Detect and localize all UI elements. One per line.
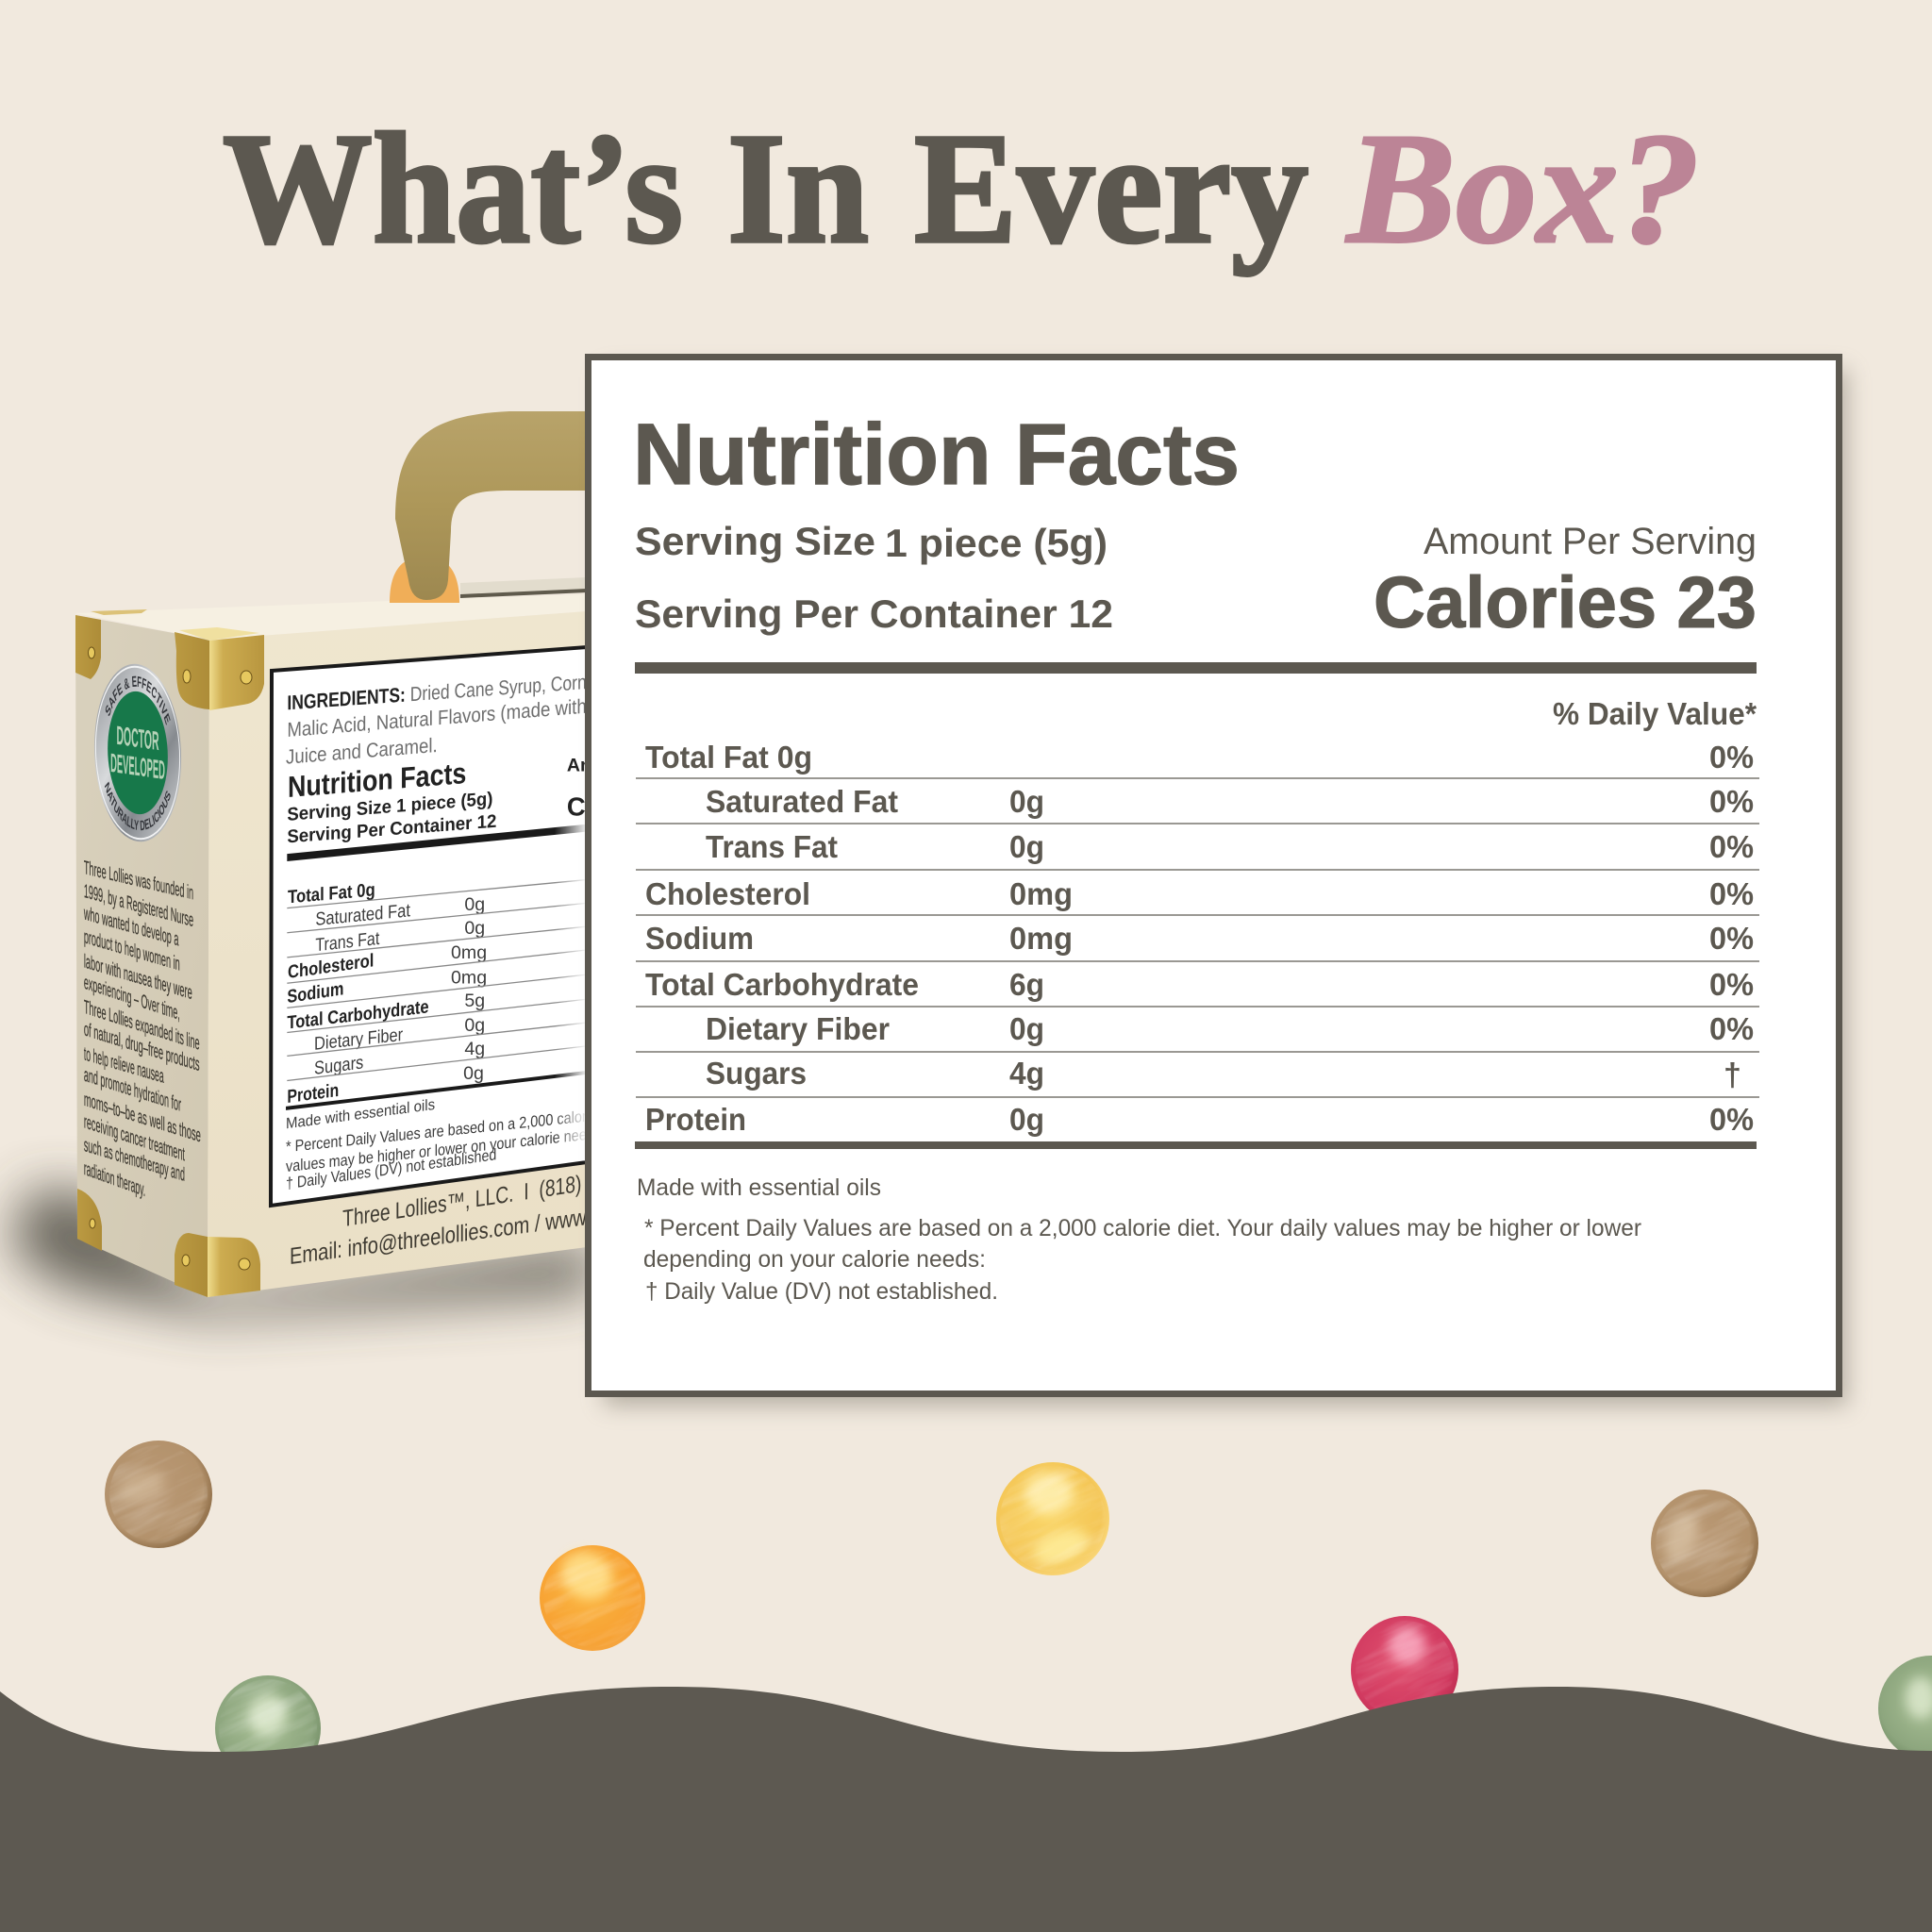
lid seam bbox=[460, 577, 587, 598]
badge: doctor developed: DOCTOR bbox=[116, 720, 159, 757]
candy: yellow bbox=[983, 1449, 1123, 1589]
row: sodium bbox=[645, 921, 1754, 956]
side panel story text: product to help women in bbox=[84, 926, 180, 975]
servings per container: Serving Per Container 12 bbox=[635, 591, 1113, 636]
product box bbox=[0, 354, 1858, 1417]
title bbox=[223, 101, 1700, 276]
box label text: 5g bbox=[464, 991, 485, 1011]
footnotes: depending on your calorie needs: bbox=[643, 1246, 986, 1273]
row: sugars: † bbox=[1724, 1058, 1741, 1093]
nutrition label on box bbox=[271, 647, 587, 1206]
box label text: 0g bbox=[464, 1015, 485, 1036]
row: sodium: Sodium bbox=[645, 921, 754, 956]
box label text: Malic Acid, Natural Flavors (made with bbox=[287, 694, 587, 741]
box top face bbox=[75, 594, 587, 640]
row: sodium: 0mg bbox=[1009, 921, 1073, 956]
footnotes: Made with essential oils bbox=[637, 1174, 881, 1201]
box label text: 0g bbox=[464, 918, 485, 939]
row: trans fat: 0g bbox=[1009, 829, 1044, 864]
gold corner: top left bbox=[75, 609, 147, 679]
rule bbox=[635, 662, 1757, 674]
box front face bbox=[208, 611, 587, 1297]
badge: doctor developed: DEVELOPED bbox=[110, 748, 165, 785]
row: sugars: 4g bbox=[1009, 1056, 1044, 1091]
side panel story text: to help relieve nausea bbox=[84, 1043, 164, 1088]
row: protein: 0% bbox=[1709, 1102, 1754, 1137]
footnotes: † Daily Value (DV) not established. bbox=[645, 1278, 998, 1305]
box label text: Trans Fat bbox=[315, 928, 380, 956]
row: dietary fiber: Dietary Fiber bbox=[706, 1011, 890, 1046]
handle bbox=[395, 411, 587, 600]
candy: orange bbox=[527, 1533, 658, 1663]
product box: labor with nausea they were bbox=[84, 951, 192, 1004]
box label text: Saturated Fat bbox=[315, 900, 410, 930]
box label text: Protein bbox=[287, 1080, 339, 1108]
serving size bbox=[635, 519, 1108, 565]
product box: of natural, drug–free products bbox=[84, 1019, 200, 1075]
candy: brown right bbox=[1640, 1478, 1770, 1608]
box label text: INGREDIENTS: Dried Cane Syrup, Corn bbox=[287, 670, 587, 714]
box label text: Total Fat 0g bbox=[288, 879, 375, 908]
candy: green left bbox=[203, 1663, 333, 1793]
row: total fat bbox=[645, 740, 1754, 774]
title: What’s bbox=[223, 101, 683, 276]
calories: Calories 23 bbox=[1374, 562, 1757, 643]
title: Box? bbox=[1345, 101, 1700, 276]
box label text: Made with essential oils bbox=[286, 1096, 435, 1132]
candy: pink bbox=[1340, 1605, 1470, 1735]
row: protein: Protein bbox=[645, 1102, 746, 1137]
row: total carbohydrate bbox=[645, 967, 1754, 1002]
row: cholesterol: 0% bbox=[1709, 876, 1754, 911]
product box: Three Lollies was founded in bbox=[84, 857, 193, 904]
side panel story text: receiving cancer treatment bbox=[84, 1111, 185, 1165]
row: cholesterol: Cholesterol bbox=[645, 876, 810, 911]
box shadow bbox=[9, 1191, 594, 1316]
box label text: † Daily Values (DV) not established bbox=[286, 1145, 496, 1192]
row: sugars bbox=[706, 1056, 1741, 1093]
product box: Three Lollies expanded its line bbox=[84, 996, 200, 1055]
title: In bbox=[727, 101, 869, 276]
side panel story text: and promote hydration for bbox=[84, 1064, 181, 1116]
row: total carbohydrate: 6g bbox=[1009, 967, 1044, 1002]
box label text: Serving Size 1 piece (5g) bbox=[287, 789, 492, 825]
side panel story text bbox=[83, 857, 201, 1201]
row: protein bbox=[645, 1102, 1754, 1137]
panel: nutrition facts bbox=[589, 357, 1840, 1394]
side panel story text: who wanted to develop a bbox=[83, 903, 179, 950]
box label text: Cholesterol bbox=[288, 950, 374, 983]
box label text: * Percent Daily Values are based on a 2,000 calor bbox=[286, 1108, 587, 1156]
candy: brown left bbox=[93, 1429, 224, 1559]
side panel story text: radiation therapy. bbox=[84, 1158, 145, 1201]
product box: moms–to–be as well as those bbox=[84, 1089, 201, 1147]
heading: nutrition facts: Nutrition Facts bbox=[633, 407, 1240, 503]
box label text: Juice and Caramel. bbox=[286, 733, 438, 769]
row: saturated fat: 0% bbox=[1709, 784, 1754, 819]
candy: green right bbox=[1878, 1656, 1932, 1761]
box label text: Sugars bbox=[314, 1052, 363, 1079]
product box: 1999, by a Registered Nurse bbox=[84, 880, 193, 931]
row: cholesterol bbox=[645, 876, 1754, 911]
thick rule bbox=[635, 1141, 1757, 1149]
row: cholesterol: 0mg bbox=[1009, 876, 1073, 911]
daily value heading: % Daily Value* bbox=[1553, 696, 1757, 731]
row: dietary fiber bbox=[706, 1011, 1754, 1046]
row: total carbohydrate: Total Carbohydrate bbox=[645, 967, 919, 1002]
gold corner: top front bbox=[175, 627, 264, 710]
box label text: 0g bbox=[463, 1063, 484, 1084]
row: trans fat: 0% bbox=[1709, 829, 1754, 864]
row: protein: 0g bbox=[1009, 1102, 1044, 1137]
box label text: Email: info@threelollies.com / www bbox=[290, 1204, 588, 1270]
row dividers bbox=[636, 777, 1759, 1098]
row: dietary fiber: 0g bbox=[1009, 1011, 1044, 1046]
row: trans fat bbox=[706, 829, 1754, 864]
row: sugars: Sugars bbox=[706, 1056, 807, 1091]
box label text: Dietary Fiber bbox=[314, 1024, 403, 1055]
gold corner: bottom left bbox=[77, 1189, 102, 1251]
row: saturated fat bbox=[706, 784, 1754, 819]
title: Every bbox=[914, 101, 1308, 276]
row: total carbohydrate: 0% bbox=[1709, 967, 1754, 1002]
badge: doctor developed: NATURALLY DELICIOUS bbox=[105, 781, 170, 830]
wave footer bbox=[0, 1687, 1932, 1932]
box label text: 0mg bbox=[451, 967, 487, 988]
side panel story text: experiencing – Over time, bbox=[84, 972, 180, 1024]
box label text: Am bbox=[567, 756, 596, 776]
row: trans fat: Trans Fat bbox=[706, 829, 838, 864]
box label text: Serving Per Container 12 bbox=[287, 811, 496, 847]
badge: doctor developed: SAFE & EFFECTIVE bbox=[106, 675, 171, 725]
footnotes bbox=[637, 1174, 1641, 1305]
footnotes: * Percent Daily Values are based on a 2,000 calorie diet. Your daily values may be higher or lower bbox=[644, 1215, 1641, 1241]
candies bbox=[93, 1429, 1932, 1793]
row: total fat: Total Fat 0g bbox=[645, 740, 812, 774]
row: sodium: 0% bbox=[1709, 921, 1754, 956]
row: total fat: 0% bbox=[1709, 740, 1754, 774]
handle bracket bbox=[390, 557, 459, 603]
box label text: 0mg bbox=[451, 942, 487, 963]
box label text bbox=[286, 670, 601, 1270]
box label text: 4g bbox=[464, 1039, 485, 1059]
box label text: Ca bbox=[567, 792, 601, 822]
amount per serving: Amount Per Serving bbox=[1424, 521, 1757, 562]
row: saturated fat: Saturated Fat bbox=[706, 784, 898, 819]
panel shadow bbox=[604, 370, 1847, 1406]
row: dietary fiber: 0% bbox=[1709, 1011, 1754, 1046]
serving size: 1 piece (5g) bbox=[885, 521, 1108, 565]
box label text: Three Lollies™, LLC. I (818) bbox=[342, 1171, 581, 1232]
box label text: values may be higher or lower on your calorie nee bbox=[286, 1125, 587, 1175]
box label text: Nutrition Facts bbox=[288, 757, 466, 804]
box label text: 0g bbox=[464, 894, 485, 915]
serving size: Serving Size bbox=[635, 519, 875, 563]
badge: doctor developed bbox=[94, 664, 181, 841]
box label text: Total Carbohydrate bbox=[287, 996, 429, 1034]
side panel story text: such as chemotherapy and bbox=[84, 1134, 185, 1186]
row: saturated fat: 0g bbox=[1009, 784, 1044, 819]
box left face bbox=[75, 615, 209, 1297]
gold corner: bottom front bbox=[175, 1233, 260, 1297]
box label text: Sodium bbox=[287, 978, 343, 1008]
